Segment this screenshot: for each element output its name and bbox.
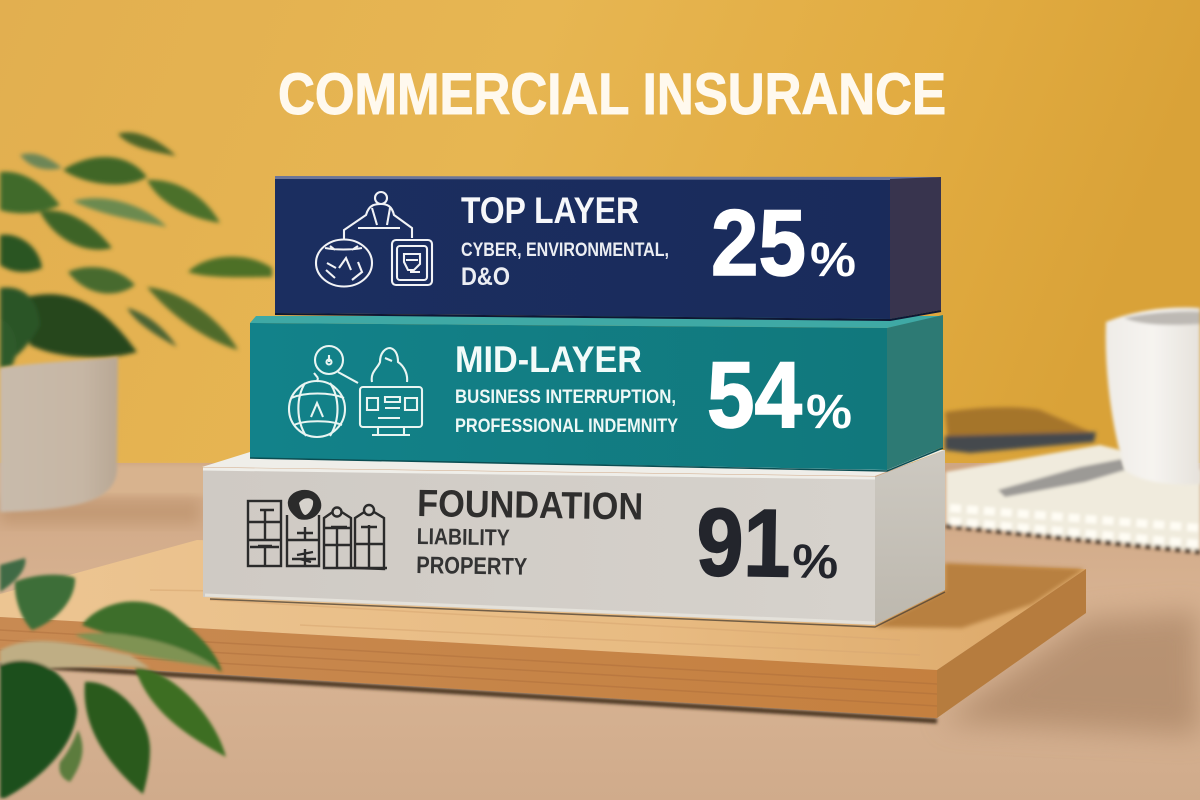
foreground plant xyxy=(0,558,226,798)
wooden table xyxy=(0,463,1200,800)
mid-layer value: 54 xyxy=(707,342,802,447)
mid-layer line 2: PROFESSIONAL INDEMNITY xyxy=(455,415,678,437)
background plant xyxy=(0,132,272,368)
top-layer icon xyxy=(316,192,432,286)
mid-layer line 1: BUSINESS INTERRUPTION, xyxy=(455,386,676,408)
foundation top face xyxy=(202,450,945,476)
mid-layer block xyxy=(250,315,943,471)
top-layer front face xyxy=(275,179,890,319)
foundation line 2: PROPERTY xyxy=(416,552,527,581)
mid-layer icon xyxy=(289,346,422,437)
board front xyxy=(0,617,937,718)
top-layer heading: TOP LAYER xyxy=(461,190,639,231)
phone on table xyxy=(945,407,1096,453)
top-layer value: 25 xyxy=(711,190,806,295)
background wall xyxy=(0,0,1200,470)
title: COMMERCIAL INSURANCE xyxy=(278,62,946,127)
top-layer top face xyxy=(275,176,941,180)
coffee cup xyxy=(1106,307,1200,484)
foundation line 1: LIABILITY xyxy=(416,523,510,550)
mid-layer top face xyxy=(250,316,943,328)
foundation value: % xyxy=(792,535,839,589)
top-layer block xyxy=(275,176,941,320)
pen xyxy=(998,459,1125,497)
shaded part of board top xyxy=(875,563,1084,628)
plant leaves xyxy=(118,132,176,156)
stem and bright blur xyxy=(0,641,150,672)
foreground leaves xyxy=(0,558,25,592)
mid-layer heading: MID-LAYER xyxy=(455,339,642,380)
foundation text xyxy=(416,483,644,583)
top-layer text xyxy=(461,190,669,291)
foundation side face xyxy=(875,450,945,625)
board right side xyxy=(937,569,1086,718)
top-layer value: % xyxy=(810,234,856,287)
plant pot xyxy=(0,357,118,512)
top-layer side face xyxy=(890,177,941,319)
mid-layer side face xyxy=(887,315,943,470)
wooden board xyxy=(0,540,1086,721)
top-layer line 1: CYBER, ENVIRONMENTAL, xyxy=(461,239,669,261)
mid-layer front face xyxy=(250,323,887,470)
foundation heading: FOUNDATION xyxy=(417,483,644,529)
mid-layer text xyxy=(455,339,678,437)
mid-layer value: % xyxy=(806,386,852,439)
foundation front face xyxy=(203,468,875,625)
foundation block xyxy=(202,450,945,627)
foundation value: 91 xyxy=(696,489,791,597)
top-layer line 2: D&O xyxy=(461,263,510,291)
board shadow line xyxy=(0,664,937,721)
board top xyxy=(0,540,1086,670)
notebook with pen xyxy=(946,445,1200,552)
foundation icon xyxy=(248,491,387,569)
